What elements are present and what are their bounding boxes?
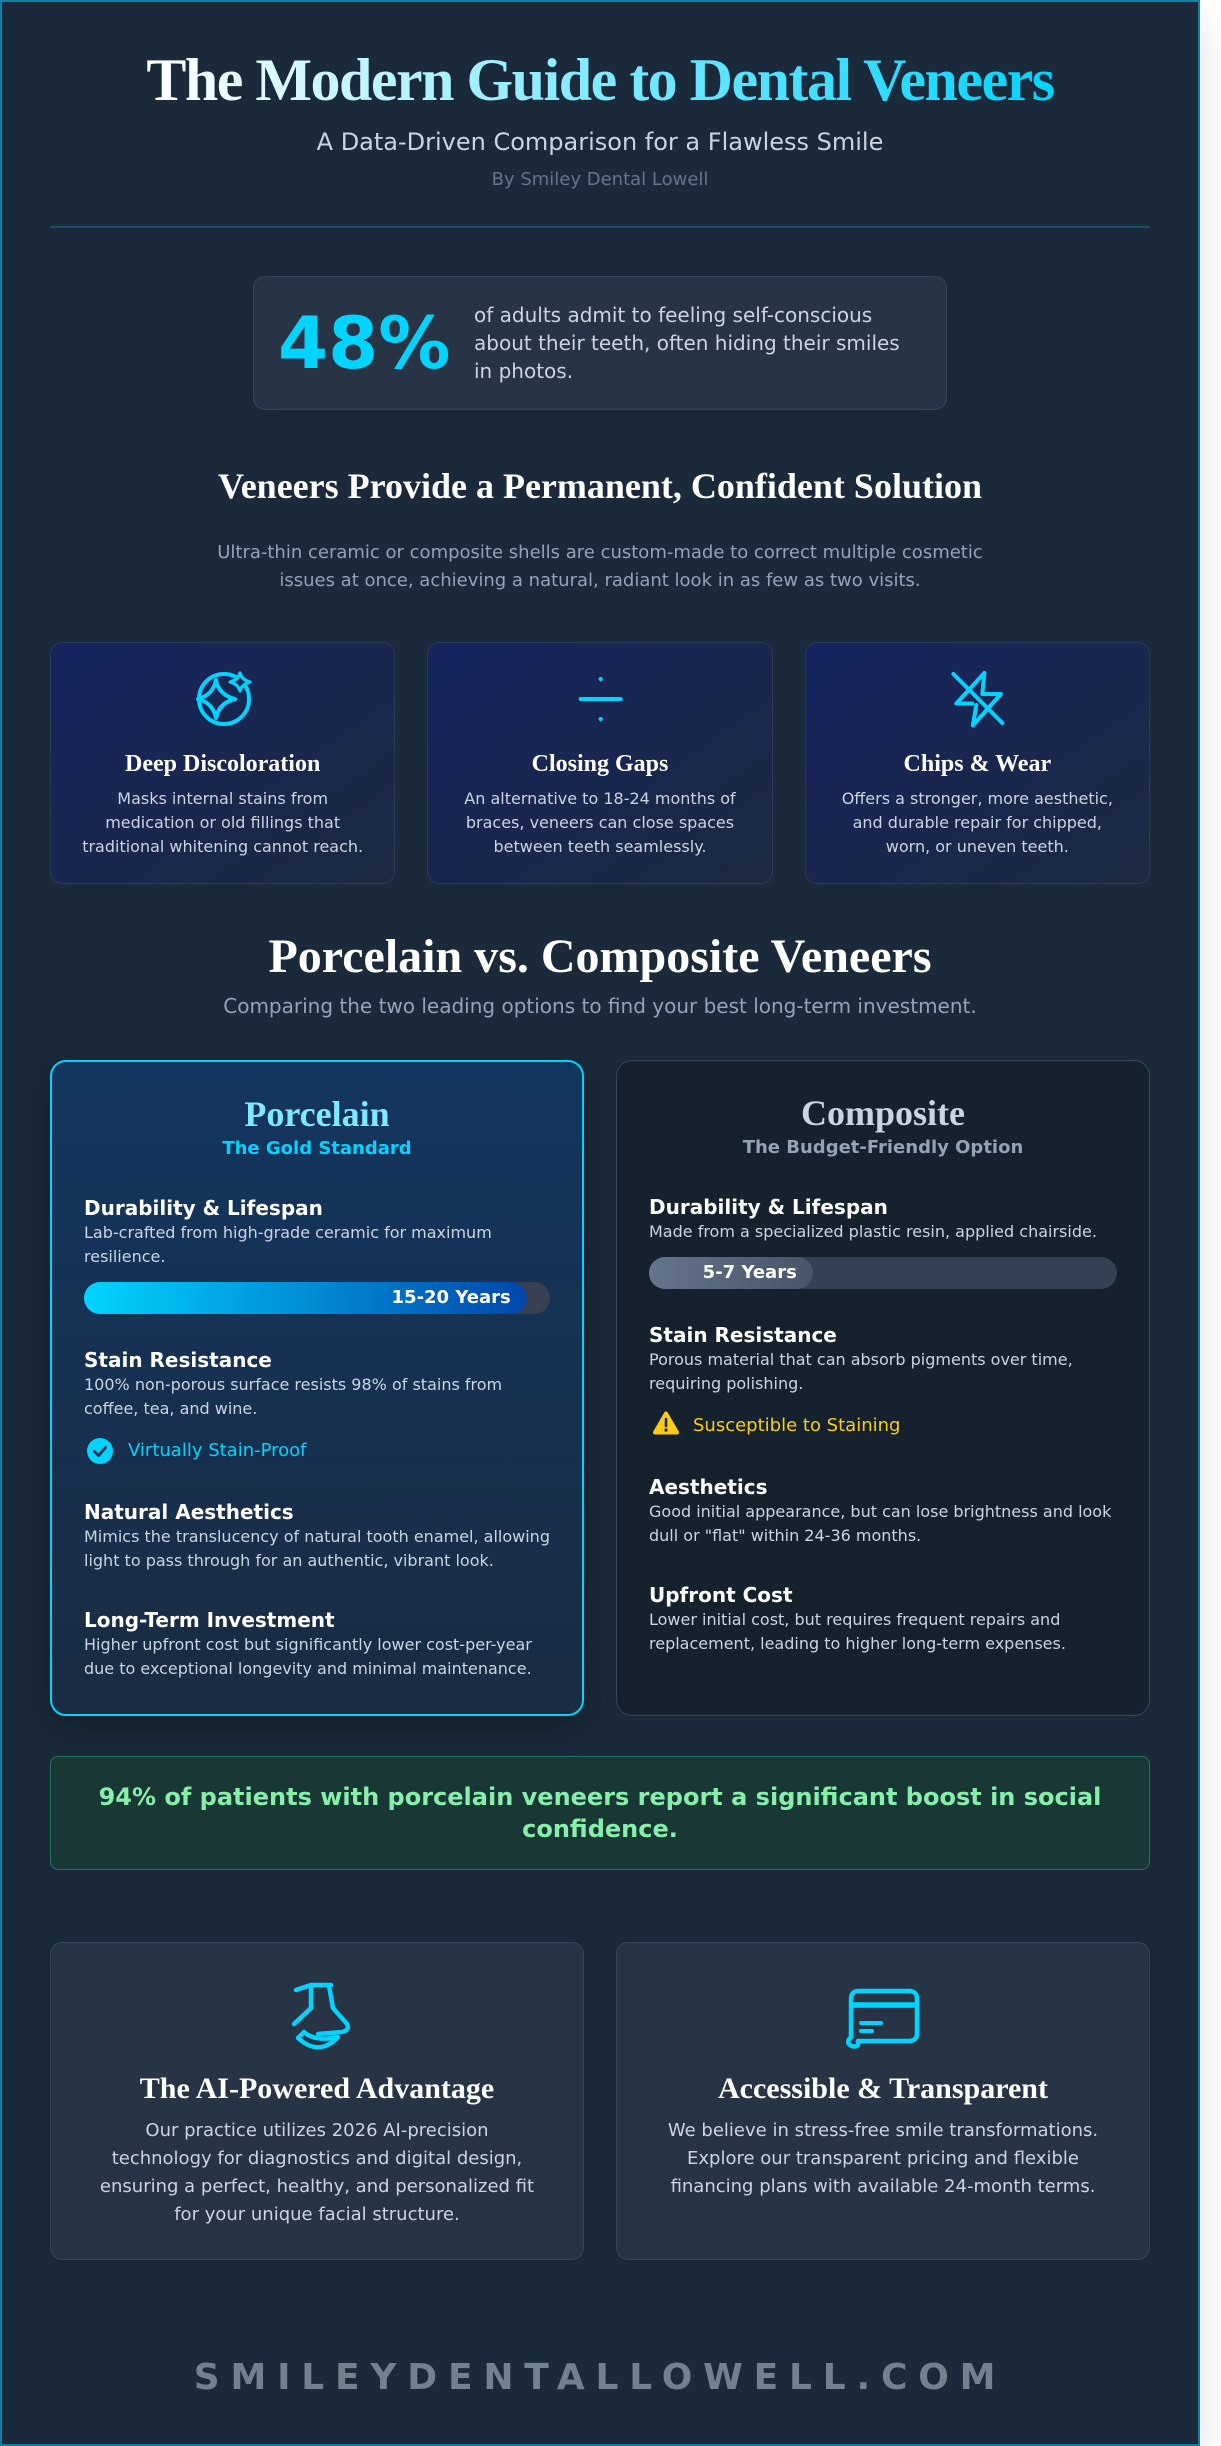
icon: payment card [846,1988,920,2049]
card text: Explore our transparent pricing and flexible [687,2148,1079,2169]
aesthetics text: light to pass through for an authentic, vibrant look. [84,1551,494,1570]
byline: By Smiley Dental Lowell [492,169,708,190]
stain text: Porous material that can absorb pigments over time, [649,1350,1073,1369]
cost text: replacement, leading to higher long-term expenses. [649,1634,1066,1653]
panel: deep discoloration [50,642,395,884]
stat text: of adults admit to feeling self-conscious [474,303,872,327]
card text: worn, or uneven teeth. [886,837,1069,856]
title: The Modern Guide to Dental Veneers [146,47,1054,113]
durability text [84,1223,492,1266]
card text: financing plans with available 24-month terms. [671,2176,1095,2197]
card text [100,2120,534,2225]
icon: warning [653,1411,680,1434]
icon: lightning off [951,670,1004,728]
card text: and durable repair for chipped, [853,813,1102,832]
panel: porcelain [50,1060,584,1716]
footer url: SMILEYDENTALLOWELL.COM [194,2357,1006,2398]
durability heading: Durability & Lifespan [84,1196,323,1220]
bar fill: 5-7 Years [703,1262,797,1283]
comparison subtitle: Comparing the two leading options to find your best long-term investment. [223,994,977,1018]
aesthetics text: Mimics the translucency of natural tooth enamel, allowing [84,1527,550,1546]
card title: Closing Gaps [532,751,668,777]
stain heading: Stain Resistance [649,1323,837,1347]
card title: Accessible & Transparent [718,2072,1048,2105]
composite tagline: The Budget-Friendly Option [743,1137,1023,1158]
card text: traditional whitening cannot reach. [82,837,363,856]
card text: Our practice utilizes 2026 AI-precision [145,2120,489,2141]
card title: Chips & Wear [904,751,1051,777]
stain heading: Stain Resistance [84,1348,272,1372]
card text: We believe in stress-free smile transformations. [668,2120,1098,2141]
callout: confidence stat: 94% of patients with porcelain veneers report a significant boost in social [99,1783,1101,1811]
aesthetics text [649,1502,1112,1545]
heading: solution: Veneers Provide a Permanent, Confident Solution [218,466,982,506]
panel: accessible and transparent [616,1942,1150,2260]
panel: chips and wear [805,642,1150,884]
stat text: about their teeth, often hiding their smiles [474,331,900,355]
aesthetics text [84,1527,550,1570]
durability text: Lab-crafted from high-grade ceramic for maximum [84,1223,492,1242]
stat text [474,303,900,383]
investment text [84,1635,532,1678]
durability bar [649,1257,1117,1289]
icon: flask [292,1982,350,2050]
panel: AI advantage [50,1942,584,2260]
durability text: Made from a specialized plastic resin, applied chairside. [649,1222,1097,1241]
aesthetics heading: Aesthetics [649,1475,768,1499]
stat text: in photos. [474,359,573,383]
investment heading: Long-Term Investment [84,1608,335,1632]
card text [82,789,363,856]
stain text: coffee, tea, and wine. [84,1399,257,1418]
card title: The AI-Powered Advantage [140,2072,494,2105]
aesthetics text: dull or "flat" within 24-36 months. [649,1526,921,1545]
status label: Virtually Stain-Proof [128,1440,307,1461]
cost text [649,1610,1066,1653]
porcelain title: Porcelain [244,1094,390,1134]
stain text [84,1375,502,1418]
card text: between teeth seamlessly. [494,837,706,856]
stain text [649,1350,1073,1393]
cost text: Lower initial cost, but requires frequent repairs and [649,1610,1060,1629]
durability text: resilience. [84,1247,165,1266]
card title: Deep Discoloration [125,751,320,777]
investment text: due to exceptional longevity and minimal maintenance. [84,1659,532,1678]
status label: Susceptible to Staining [693,1415,900,1436]
bar fill: 15-20 Years [392,1287,511,1308]
icon: check [87,1438,113,1464]
solution description: issues at once, achieving a natural, radiant look in as few as two visits. [279,570,921,590]
stat number: 48% [278,301,450,385]
panel: composite [616,1060,1150,1716]
card text: Masks internal stains from [117,789,328,808]
card text [842,789,1113,856]
header divider [50,226,1150,228]
panel: closing gaps [427,642,773,884]
composite title: Composite [801,1093,965,1133]
stain text: requiring polishing. [649,1374,803,1393]
card text [464,789,736,856]
durability bar [84,1282,550,1314]
bar fill [84,1282,527,1314]
solution description [217,542,983,590]
investment text: Higher upfront cost but significantly lower cost-per-year [84,1635,532,1654]
icon: divide [578,676,623,722]
card text [668,2120,1098,2197]
card text: braces, veneers can close spaces [466,813,734,832]
card text: Offers a stronger, more aesthetic, [842,789,1113,808]
bar fill [649,1257,813,1289]
porcelain tagline: The Gold Standard [222,1138,412,1159]
callout: confidence stat [50,1756,1150,1870]
cost heading: Upfront Cost [649,1583,793,1607]
card text: ensuring a perfect, healthy, and personalized fit [100,2176,534,2197]
aesthetics text: Good initial appearance, but can lose brightness and look [649,1502,1111,1521]
stat callout [253,276,947,410]
card text: medication or old fillings that [105,813,340,832]
subtitle: A Data-Driven Comparison for a Flawless Smile [317,128,883,156]
callout: confidence stat: confidence. [522,1815,678,1843]
durability heading: Durability & Lifespan [649,1195,888,1219]
stain text: 100% non-porous surface resists 98% of stains from [84,1375,502,1394]
card text: technology for diagnostics and digital design, [112,2148,522,2169]
card text: An alternative to 18-24 months of [464,789,736,808]
heading: comparison: Porcelain vs. Composite Veneers [268,930,932,983]
solution description: Ultra-thin ceramic or composite shells are custom-made to correct multiple cosmetic [217,542,983,562]
icon: sparkle circle [196,671,252,726]
card text: for your unique facial structure. [174,2204,460,2225]
aesthetics heading: Natural Aesthetics [84,1500,294,1524]
